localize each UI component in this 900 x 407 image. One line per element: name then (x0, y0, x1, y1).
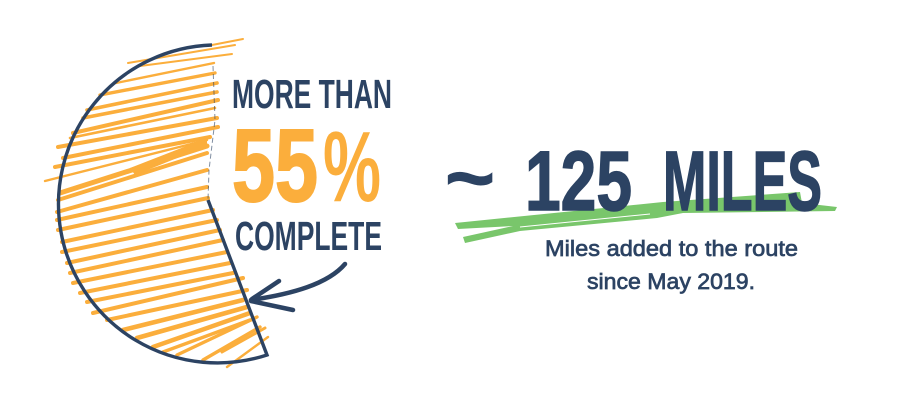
brush slit (520, 214, 650, 227)
label: 55 percent: % (323, 111, 381, 223)
pie chart: 55 percent complete (45, 39, 268, 367)
caption (545, 236, 798, 294)
label: complete: COMPLETE (235, 213, 382, 259)
arrow pointing to pie edge (251, 264, 345, 310)
label: 55 percent: 55 (232, 108, 318, 223)
pie outline (58, 45, 267, 363)
caption: Miles added to the route (545, 236, 798, 261)
dashed top of cut edge (208, 66, 215, 200)
headline: 125 miles (525, 134, 822, 228)
headline: 125 miles: 125 (525, 134, 632, 228)
label: more than: MORE THAN (232, 71, 392, 117)
tilde: ~ (445, 133, 495, 222)
caption: since May 2019. (587, 269, 755, 294)
green underline (455, 192, 837, 243)
thick orange band (130, 138, 207, 175)
orange hatching (45, 39, 268, 367)
